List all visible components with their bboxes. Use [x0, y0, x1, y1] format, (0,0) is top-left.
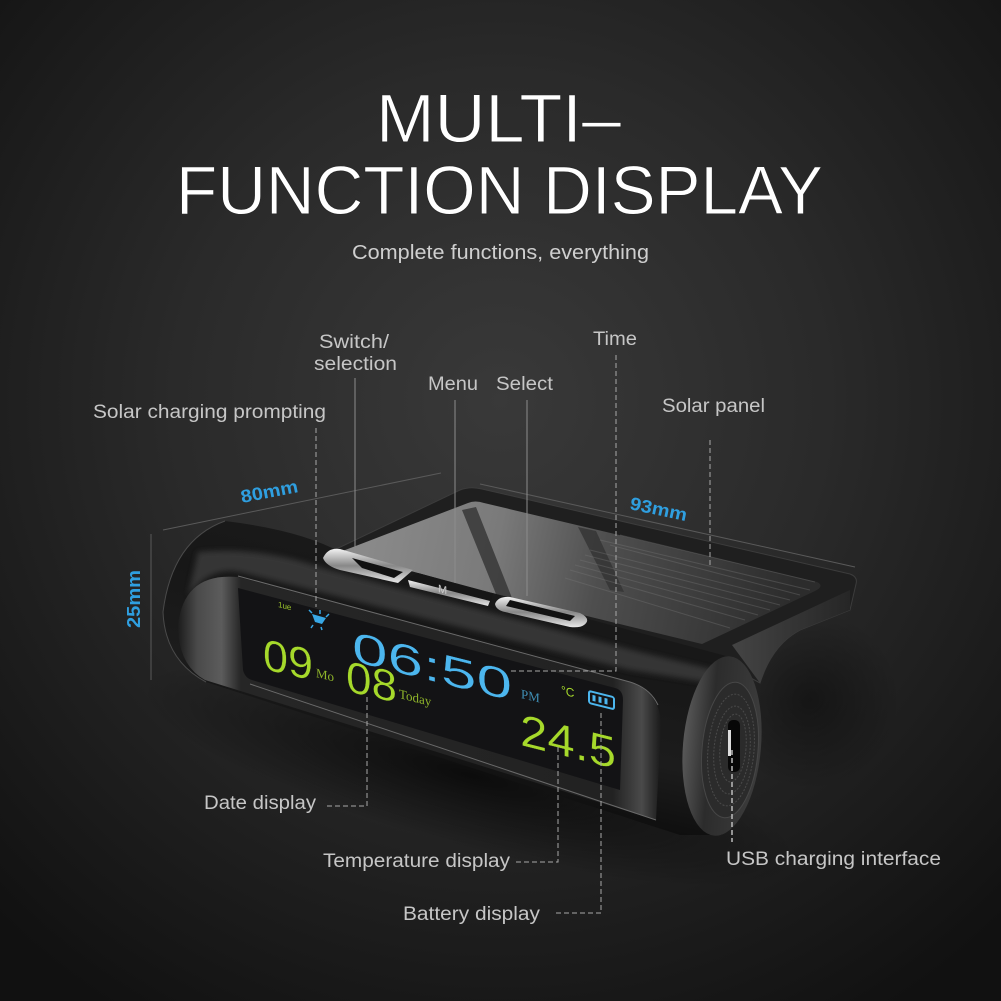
LCD readouts: 08 [346, 653, 397, 713]
callout: Temperature display [323, 747, 558, 872]
callout: Time [511, 329, 637, 671]
LCD readouts: 1ue [278, 600, 292, 612]
callout: Select: Select [496, 374, 554, 395]
dimension: 80mm: 80mm [239, 476, 300, 507]
callout: Solar panel: Solar panel [662, 396, 765, 417]
LCD readouts: 09 [263, 631, 313, 690]
LCD readouts: Today [399, 686, 432, 709]
LCD readouts: °C [561, 683, 575, 700]
LCD screen [238, 588, 623, 790]
dimension: 25mm: 25mm [124, 570, 144, 628]
LCD readouts: PM [521, 686, 540, 706]
right end cap [675, 653, 769, 839]
product: solar display device [123, 488, 900, 933]
floor shadow [123, 617, 817, 933]
LCD readouts [263, 600, 616, 779]
callout: Battery display: Battery display [403, 904, 541, 925]
subtitle: Complete functions, everything [352, 242, 649, 264]
callout: Switch/selection: selection [314, 354, 397, 375]
title: FUNCTION DISPLAY [176, 152, 823, 229]
callout: Battery display [403, 710, 601, 925]
LCD readouts: 06:50 [352, 623, 512, 711]
icon: battery [589, 691, 614, 709]
dimension: 93mm: 93mm [628, 493, 689, 525]
device body [163, 521, 730, 835]
callout: Time: Time [593, 329, 637, 350]
callout: USB charging interface: USB charging interface [726, 849, 941, 870]
callout: Date display [204, 697, 367, 814]
dimension: 80mm [163, 473, 441, 530]
title [176, 80, 823, 229]
callout: Switch/selection: Switch/ [319, 332, 390, 353]
callout: Date display: Date display [204, 793, 317, 814]
LCD readouts: Mo [316, 665, 334, 685]
USB port [728, 720, 740, 772]
icon: solar charging [309, 610, 329, 630]
dimension: 93mm [480, 484, 855, 567]
callout: Solar charging prompting: Solar charging prompting [93, 402, 326, 423]
buttons [323, 549, 587, 627]
solar panel [330, 488, 856, 683]
LCD readouts: 24.5 [520, 705, 616, 779]
buttons: M [438, 583, 447, 597]
callout: Temperature display: Temperature display [323, 851, 511, 872]
title: MULTI– [376, 80, 622, 157]
callout: Switch/selection [314, 332, 397, 553]
callout: Menu: Menu [428, 374, 478, 395]
bezel [178, 577, 661, 820]
